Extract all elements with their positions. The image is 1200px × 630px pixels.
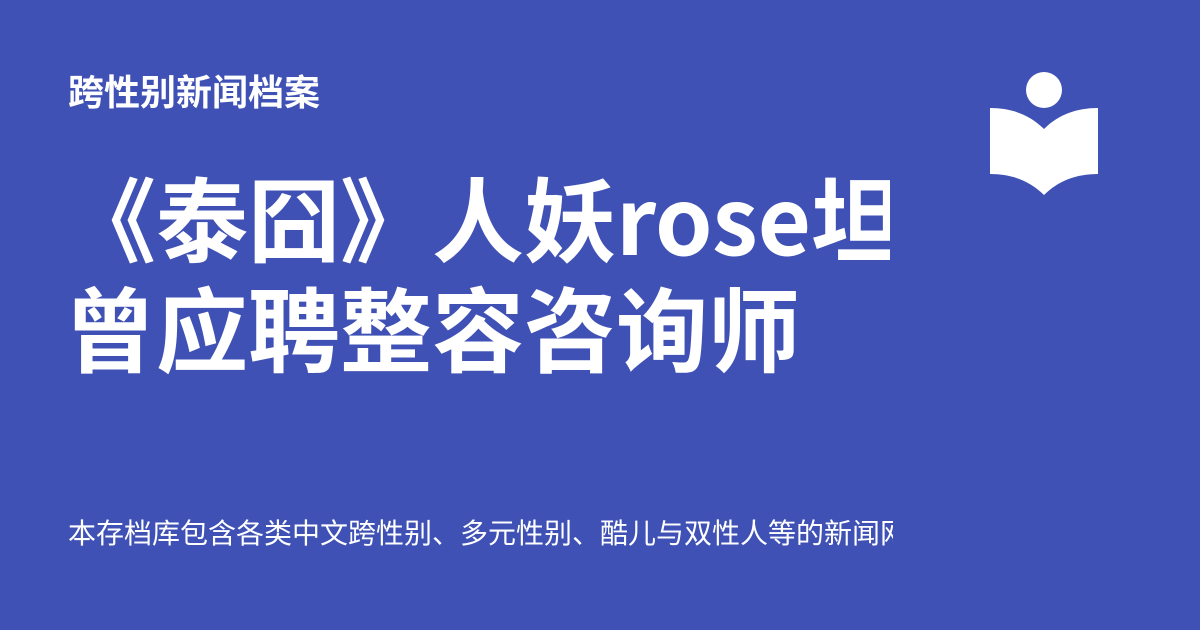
article title — [64, 161, 890, 385]
icon: open book with reader — [990, 72, 1098, 195]
site name heading: 跨性别新闻档案 — [68, 64, 320, 116]
